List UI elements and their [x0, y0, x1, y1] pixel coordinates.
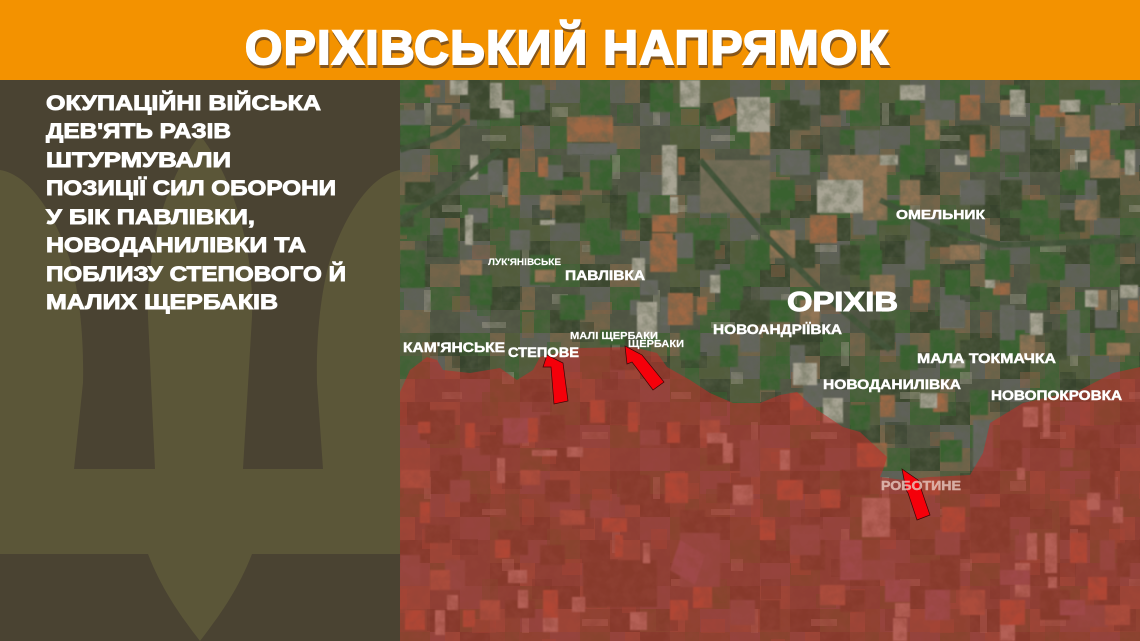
label: РОБОТИНЕ: РОБОТИНЕ — [881, 478, 961, 493]
text block: summary: У БІК ПАВЛІВКИ, — [46, 206, 255, 229]
label: НОВОДАНИЛІВКА: НОВОДАНИЛІВКА — [823, 377, 961, 392]
label: НОВОАНДРІЇВКА: НОВОАНДРІЇВКА — [713, 322, 842, 337]
text block: summary: ПОЗИЦІЇ СИЛ ОБОРОНИ — [46, 177, 336, 200]
Orikhiv town area — [700, 160, 770, 213]
text block: summary — [46, 91, 346, 314]
label: ОМЕЛЬНИК: ОМЕЛЬНИК — [896, 207, 985, 222]
text block: summary: ДЕВ'ЯТЬ РАЗІВ — [46, 120, 231, 143]
text block: summary: ОКУПАЦІЙНІ ВІЙСЬКА — [46, 91, 321, 115]
icon: trident emblem — [0, 135, 400, 641]
text block: summary: ПОБЛИЗУ СТЕПОВОГО Й — [46, 262, 346, 286]
label: МАЛА ТОКМАЧКА: МАЛА ТОКМАЧКА — [917, 351, 1056, 366]
river valley — [400, 120, 1140, 350]
map field mosaic — [400, 80, 1138, 641]
label: ЛУК'ЯНІВСЬКЕ: ЛУК'ЯНІВСЬКЕ — [488, 257, 561, 267]
arrow: towards Малі Щербаки — [625, 346, 664, 390]
occupied territory (red overlay) — [400, 347, 1140, 641]
arrow: towards Степове — [543, 355, 568, 404]
arrow: towards Роботине — [902, 469, 930, 520]
label: КАМ'ЯНСЬКЕ: КАМ'ЯНСЬКЕ — [403, 339, 505, 355]
label: ОРІХІВ: ОРІХІВ — [787, 286, 898, 317]
text block: summary: НОВОДАНИЛІВКИ ТА — [46, 234, 306, 257]
satellite map — [400, 80, 1140, 641]
label: МАЛІ ЩЕРБАКИ: МАЛІ ЩЕРБАКИ — [570, 331, 658, 342]
label: СТЕПОВЕ: СТЕПОВЕ — [508, 344, 579, 360]
label: ЩЕРБАКИ: ЩЕРБАКИ — [628, 339, 684, 350]
label: НОВОПОКРОВКА: НОВОПОКРОВКА — [991, 388, 1122, 403]
label: ПАВЛІВКА: ПАВЛІВКА — [565, 268, 645, 283]
header band — [0, 0, 1140, 80]
text block: summary: ШТУРМУВАЛИ — [46, 149, 231, 172]
text block: summary: МАЛИХ ЩЕРБАКІВ — [46, 291, 278, 314]
title: ОРІХІВСЬКИЙ НАПРЯМОК — [245, 20, 889, 75]
left panel with trident emblem — [0, 80, 400, 641]
